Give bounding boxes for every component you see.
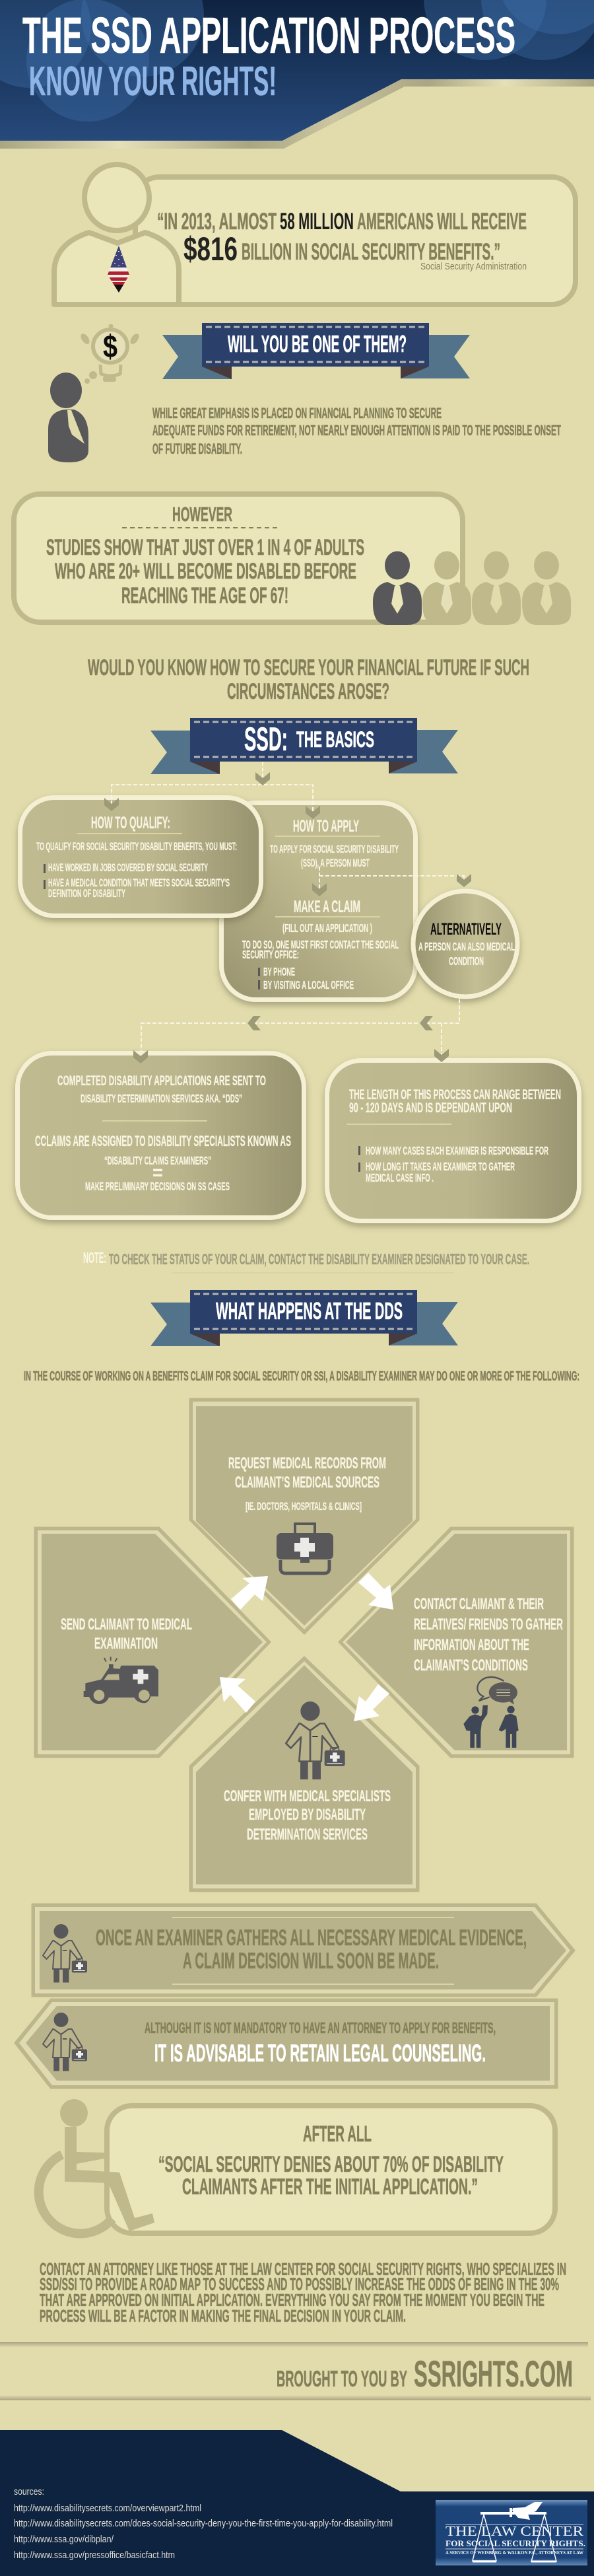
sources list: http://www.disabilitysecrets.com/does-social-security-deny-you-the-first-time-you-apply-for-disability.html — [14, 2518, 393, 2529]
panel: alternatively circle — [413, 891, 517, 997]
examination text: SEND CLAIMANT TO MEDICAL — [61, 1616, 192, 1633]
icon: medical bag — [277, 1524, 333, 1573]
contact text — [414, 1595, 563, 1674]
text block: intro paragraph: OF FUTURE DISABILITY. — [152, 441, 242, 457]
icon: doctor with bag — [286, 1701, 345, 1779]
banner title: WILL YOU BE ONE OF THEM? — [228, 330, 407, 357]
request text: CLAIMANT’S MEDICAL SOURCES — [235, 1474, 380, 1491]
make a claim text — [242, 921, 399, 991]
icon: thinking person with dollar light bulb: $ — [103, 330, 117, 365]
dds text — [35, 1073, 291, 1193]
dds text: “DISABILITY CLAIMS EXAMINERS” — [104, 1154, 211, 1167]
dds text: MAKE PRELIMINARY DECISIONS ON SS CASES — [85, 1180, 230, 1193]
icon: ambulance — [84, 1657, 158, 1704]
attorney text — [145, 2019, 496, 2067]
qualification text: DEFINITION OF DISABILITY — [48, 888, 125, 900]
logo: the law center: FOR SOCIAL SECURITY RIGHTS. — [446, 2538, 585, 2548]
request text — [228, 1454, 386, 1513]
panel: however statistic — [14, 494, 571, 625]
statistic text: REACHING THE AGE OF 67! — [121, 583, 288, 608]
panel: disability determination services — [17, 1053, 304, 1218]
quote text — [157, 209, 527, 268]
icon: wheelchair user — [39, 2099, 154, 2234]
request text: REQUEST MEDICAL RECORDS FROM — [228, 1454, 386, 1472]
banner title — [244, 721, 374, 758]
qualification text: TO QUALIFY FOR SOCIAL SECURITY DISABILITY BENEFITS, YOU MUST: — [36, 841, 237, 853]
icon: one in four people — [373, 551, 571, 625]
make a claim text: (FILL OUT AN APPLICATION ) — [282, 921, 372, 935]
alternatively text — [418, 940, 515, 968]
text block: intro paragraph — [152, 405, 561, 457]
make a claim text: BY VISITING A LOCAL OFFICE — [263, 978, 354, 991]
panel: statistic quote with person — [54, 164, 576, 304]
panel: send claimant to examination — [35, 1528, 270, 1757]
note — [83, 1249, 529, 1273]
heading: ALTERNATIVELY — [430, 920, 502, 939]
subtitle: KNOW YOUR RIGHTS! — [29, 59, 277, 104]
banner title: THE BASICS — [296, 727, 374, 752]
dds text: DISABILITY DETERMINATION SERVICES AKA. “DDS” — [81, 1092, 242, 1105]
qualification text — [36, 841, 237, 900]
how to apply text: TO APPLY FOR SOCIAL SECURITY DISABILITY — [270, 843, 399, 855]
text block: contact an attorney — [40, 2259, 566, 2326]
request text: [IE. DOCTORS, HOSPITALS & CLINICS] — [246, 1500, 362, 1513]
panel: request medical records — [190, 1399, 418, 1633]
make a claim text: BY PHONE — [263, 965, 295, 978]
credit strip: brought to you by: BROUGHT TO YOU BY — [277, 2367, 407, 2392]
qualification text: HAVE A MEDICAL CONDITION THAT MEETS SOCIAL SECURITY'S — [48, 877, 230, 889]
quote text — [158, 2152, 504, 2200]
panel: contact claimant — [339, 1528, 573, 1757]
arrows: chevrons into lower panels — [133, 1049, 449, 1063]
statistic text — [46, 535, 364, 608]
quote text: 58 MILLION — [280, 209, 354, 234]
alternatively text: CONDITION — [449, 954, 484, 968]
icon: doctor — [43, 2013, 87, 2071]
banner title: SSD: — [244, 721, 288, 758]
question heading: CIRCUMSTANCES AROSE? — [227, 679, 389, 704]
sources list — [14, 2486, 393, 2561]
qualification text: HAVE WORKED IN JOBS COVERED BY SOCIAL SECURITY — [48, 862, 208, 874]
dds text: = — [152, 1162, 163, 1184]
process text: MEDICAL CASE INFO . — [366, 1171, 434, 1184]
heading: make a claim: MAKE A CLAIM — [294, 898, 360, 916]
panel: how to apply and make a claim — [222, 803, 416, 1000]
header banner — [0, 0, 594, 149]
logo: the law center: THE LAW CENTER — [446, 2523, 583, 2539]
examination text — [61, 1616, 192, 1653]
question heading — [88, 655, 529, 704]
examination text: EXAMINATION — [94, 1635, 158, 1653]
sources list: http://www.ssa.gov/pressoffice/basicfact.htm — [14, 2550, 175, 2561]
process text — [346, 1087, 561, 1184]
how to apply text: (SSD), A PERSON MUST — [301, 857, 370, 869]
confer text: EMPLOYED BY DISABILITY — [249, 1806, 366, 1824]
make a claim text: TO DO SO, ONE MUST FIRST CONTACT THE SOCIAL — [242, 938, 399, 951]
quote source: Social Security Administration — [420, 261, 527, 272]
heading: HOWEVER — [172, 503, 232, 526]
banner title: WHAT HAPPENS AT THE DDS — [216, 1297, 403, 1324]
note: NOTE: — [83, 1249, 106, 1266]
confer text: CONFER WITH MEDICAL SPECIALISTS — [224, 1787, 391, 1805]
dds text: COMPLETED DISABILITY APPLICATIONS ARE SENT TO — [57, 1073, 266, 1089]
dds text: CCLAIMS ARE ASSIGNED TO DISABILITY SPECIALISTS KNOWN AS — [35, 1133, 291, 1149]
panel: how to qualify — [20, 798, 261, 915]
panel: confer with specialists — [190, 1657, 418, 1891]
sources list: http://www.ssa.gov/dibplan/ — [14, 2534, 114, 2545]
make a claim text: SECURITY OFFICE: — [242, 948, 299, 961]
sources list: http://www.disabilitysecrets.com/overviewpart2.html — [14, 2503, 201, 2514]
heading: HOW TO QUALIFY: — [91, 814, 170, 832]
panel: attorney advice arrow — [15, 1999, 557, 2088]
how to apply text — [270, 843, 399, 869]
banner: what happens at the DDS — [150, 1290, 458, 1346]
credit strip: brought to you by — [0, 2342, 591, 2400]
sources list: sources: — [14, 2486, 44, 2497]
icon: person with flag tie — [54, 164, 179, 304]
heading: AFTER ALL — [303, 2122, 372, 2147]
confer text — [224, 1787, 391, 1843]
confer text: DETERMINATION SERVICES — [247, 1826, 368, 1843]
icon: doctor — [43, 1924, 87, 1983]
alternatively text: A PERSON CAN ALSO MEDICAL — [418, 940, 515, 953]
arrows: flow connectors — [104, 762, 471, 1060]
icon: two people talking — [463, 1677, 519, 1748]
quote text: $816 — [183, 231, 238, 268]
heading: how to apply: HOW TO APPLY — [293, 817, 359, 836]
statistic text: WHO ARE 20+ WILL BECOME DISABLED BEFORE — [55, 559, 356, 584]
decision text — [96, 1925, 527, 1974]
footer — [0, 2430, 594, 2576]
arrows: cycle between DDS actions — [220, 1573, 393, 1721]
panel: after all quote — [39, 2099, 555, 2234]
panel: length of process — [327, 1061, 579, 1221]
quote text: “IN 2013, ALMOST — [157, 209, 277, 234]
banner: SSD the basics — [150, 718, 458, 774]
panel: claim decision arrow — [32, 1904, 574, 1996]
logo: the law center — [436, 2500, 587, 2565]
icon: thinking person with dollar light bulb — [48, 324, 141, 462]
banner: will you be one of them — [162, 323, 470, 379]
